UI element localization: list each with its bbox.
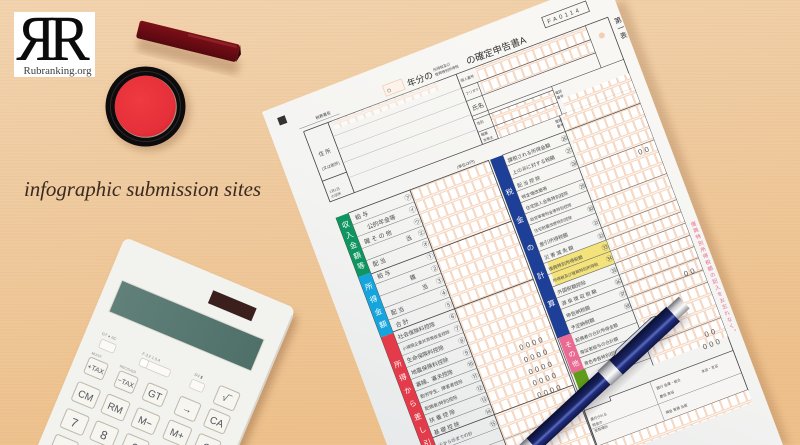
circled row numbers: ⑦ xyxy=(453,324,462,334)
form header: 所得税及び xyxy=(432,61,451,72)
right column panel: tax calculation: その他 xyxy=(563,340,581,371)
circled row numbers: ㉙ xyxy=(578,182,587,192)
taxpayer details: 氏名 xyxy=(471,101,485,113)
circled row numbers: ⑪ xyxy=(471,372,480,382)
circled row numbers: ㊱ xyxy=(614,278,623,287)
calculation row labels: 差引所得税額 xyxy=(538,231,569,249)
circled row numbers: ㉖ xyxy=(560,134,569,144)
income row labels: 雑 xyxy=(409,273,417,282)
form header: 年分の xyxy=(405,69,435,89)
bank refund panel xyxy=(577,337,753,445)
taxpayer details: 性別 xyxy=(476,119,485,126)
calculation row labels: 災 害 減 免 額 xyxy=(543,244,574,262)
bank refund panel: 還付される xyxy=(589,411,608,422)
address box xyxy=(304,17,748,445)
sheet number: 第一表 xyxy=(613,15,629,41)
key labels xyxy=(52,339,235,445)
calculation row labels: 源 泉 徴 収 税 額 xyxy=(561,288,598,308)
calculation row labels xyxy=(507,141,631,367)
circled row numbers: ㉟ xyxy=(609,266,619,276)
switch labels: GT ● AC xyxy=(101,331,117,341)
income row labels: 寡婦、寡夫控除 xyxy=(415,368,454,389)
address labels: 1月1日 xyxy=(329,186,341,194)
address labels: (又は居所) xyxy=(321,159,341,171)
left column panel: income: (単位は円) xyxy=(456,157,476,170)
switches xyxy=(98,339,206,393)
income row labels: 合 計 xyxy=(394,317,410,329)
circled row numbers: ⑨ xyxy=(462,348,471,358)
strip: deductions xyxy=(381,333,460,445)
taxpayer details xyxy=(456,17,644,171)
income row labels: 当 xyxy=(405,234,413,243)
form header: の確定申告書A xyxy=(464,34,528,67)
upper navy barrel xyxy=(608,307,680,376)
calculation row labels: 配偶者の合計所得金額 xyxy=(574,321,619,344)
income row labels: 勤労学生、障害者控除 xyxy=(419,378,464,400)
calculation row labels: 住宅借入金等特別控除 xyxy=(525,189,570,212)
preprinted zeros, right column: 00 xyxy=(703,326,719,339)
circled row numbers: ㋒ xyxy=(413,217,422,227)
preprinted zeros, right column xyxy=(629,144,725,352)
income row labels xyxy=(352,197,488,445)
script title: infographic submission sites xyxy=(24,177,261,201)
calculation row labels: 住宅耐震改修特別控除 xyxy=(533,214,573,234)
form header xyxy=(295,33,528,131)
right column panel: tax calculation xyxy=(484,87,730,398)
logo: Rubranking.org: R xyxy=(49,3,90,74)
pen clip xyxy=(612,315,657,357)
highlighted yellow rows xyxy=(547,240,615,286)
circled row numbers: ㉚ xyxy=(586,205,596,214)
bank refund panel: 銀行 金庫・組合 xyxy=(656,377,682,391)
calculation row labels: 復興特別所得税額 xyxy=(548,253,584,273)
key labels: M+ xyxy=(168,427,185,443)
circled row numbers: ⑥ xyxy=(448,312,458,322)
income row labels: 給 与 xyxy=(354,209,369,222)
income row labels: 地震保険料控除 xyxy=(410,355,450,377)
red stamp stick xyxy=(133,20,244,75)
display xyxy=(109,280,264,371)
preprinted zeros, left column: 0000 xyxy=(523,346,551,364)
tax return form xyxy=(277,0,766,445)
calculation row labels: 上の㉖に対する税額 xyxy=(511,154,556,176)
calculation row labels: 専従者給与の合計額 xyxy=(579,335,620,356)
taxpayer details: 個人番号 xyxy=(460,73,475,83)
switch labels: F 3 2 1 0 A xyxy=(142,351,162,363)
strip: other xyxy=(559,334,584,374)
circled row numbers xyxy=(560,134,632,312)
circled row numbers: ④ xyxy=(439,289,449,299)
left column panel: income: 収入金額等 xyxy=(340,219,368,274)
form header: ○ xyxy=(385,85,393,95)
calculation row labels: 予定納税額 xyxy=(570,317,596,332)
circled row numbers: ㉜ xyxy=(596,232,606,242)
key labels: RM xyxy=(106,401,124,417)
taxpayer details: 000 xyxy=(618,112,632,122)
registration mark xyxy=(277,115,287,126)
bank refund panel: 本店・支店 xyxy=(701,363,719,374)
pen tip chrome xyxy=(667,297,690,319)
strip: income subtotal xyxy=(358,273,393,338)
circled row numbers: ㋔ xyxy=(421,240,430,250)
logo: Rubranking.org: Rubranking.org xyxy=(24,66,92,77)
form code box xyxy=(542,1,590,28)
income row labels: 雑 そ の 他 xyxy=(363,228,393,246)
key labels: +TAX xyxy=(86,363,105,377)
circled row numbers: ③ xyxy=(435,276,444,286)
income row labels: 配 当 xyxy=(390,305,405,317)
taxpayer details: 世帯主 xyxy=(482,134,494,143)
left column panel: income xyxy=(333,153,603,445)
calculation row labels: 政党等寄附金等特別控除 xyxy=(529,201,572,222)
calculation row labels: 青色申告特別控除額 xyxy=(583,346,624,367)
income row labels: 社会保険料控除 xyxy=(397,320,437,341)
circled row numbers: ㉞ xyxy=(605,254,614,264)
taxpayer details: 番号 xyxy=(556,93,565,100)
calculator xyxy=(2,237,302,445)
chrome ring xyxy=(598,360,623,385)
key labels: M− xyxy=(136,415,154,430)
strip: tax calculation xyxy=(490,155,570,338)
red ink pad xyxy=(106,66,190,151)
paper shadow xyxy=(270,0,790,445)
calculation row labels: 外国税額控除 xyxy=(556,279,587,296)
paper sheet xyxy=(262,0,783,445)
key labels: GT xyxy=(146,388,163,403)
ballpoint pen xyxy=(509,294,694,445)
taxpayer details: 整理 xyxy=(554,117,563,124)
strip: extension xyxy=(573,369,592,392)
switch labels xyxy=(90,330,204,399)
left column panel: income: 所得金額 xyxy=(362,280,391,335)
calculation row labels: 特定増改築等 xyxy=(521,185,549,201)
circled row numbers: ㉝ xyxy=(601,243,610,253)
taxpayer details: フリガナ xyxy=(465,86,480,96)
preprinted zeros, left column: 0000 xyxy=(527,359,556,376)
circled row numbers: ㊳ xyxy=(623,302,632,312)
switch labels: 5/4 ▮ xyxy=(194,372,204,380)
switch labels: MU/ST xyxy=(91,351,103,359)
lower navy barrel xyxy=(526,372,610,445)
income row labels: 配 当 xyxy=(371,256,387,268)
preprinted zeros, right column: 000 xyxy=(701,336,724,352)
right column panel: tax calculation: 税金の計算 xyxy=(503,185,565,329)
preprinted zeros, left column xyxy=(518,334,564,400)
circled row numbers: ① xyxy=(426,252,435,262)
income row labels: 扶 養 控 除 xyxy=(428,407,457,425)
circled row numbers: ⑧ xyxy=(457,336,467,346)
taxpayer details: 職業 xyxy=(480,130,489,137)
form header: 税務署長 xyxy=(314,109,331,120)
bank refund panel: 受取場所 xyxy=(594,423,609,433)
income row labels: 公的年金等 xyxy=(366,213,397,231)
address labels: 住 所 xyxy=(317,146,332,159)
circled row numbers: ② xyxy=(430,264,440,274)
circled row numbers: ⑬ xyxy=(479,395,489,405)
income row labels: 配偶者(特別)控除 xyxy=(424,394,459,412)
pen lower chrome xyxy=(516,438,539,445)
circled row numbers: ⑫ xyxy=(475,384,485,394)
calculation row labels: 所得税及び復興特別所得税 xyxy=(552,261,599,283)
key labels: 7 xyxy=(69,415,80,431)
taxpayer details: 番号 xyxy=(556,122,565,129)
solar panel xyxy=(208,290,257,321)
key labels: 8 xyxy=(98,427,110,443)
address labels xyxy=(314,145,351,199)
circled row numbers: ㉘ xyxy=(569,160,579,170)
key labels: CM xyxy=(76,388,95,405)
circled row numbers: ㉛ xyxy=(591,219,601,228)
income row labels: 生命保険料控除 xyxy=(405,343,445,365)
circled row numbers: ㋓ xyxy=(417,229,426,239)
logo: Rubranking.org: R xyxy=(16,4,55,75)
circled row numbers: ⑮ xyxy=(489,420,498,430)
preprinted zeros, right column: 00 xyxy=(637,144,653,157)
form header: 復興特別所得税 xyxy=(434,63,460,77)
key labels: → xyxy=(180,403,194,417)
income row labels: 給 与 xyxy=(376,268,392,281)
income row labels: 当 xyxy=(421,282,429,292)
calculation row labels: 配 当 控 除 xyxy=(516,175,541,190)
key labels: √‾ xyxy=(220,391,233,406)
circled row numbers: ⑭ xyxy=(484,407,493,417)
strip: income amount xyxy=(336,213,370,277)
income row labels: 小規模企業共済等掛金控除 xyxy=(401,328,452,353)
income row labels: 基 礎 控 除 xyxy=(433,420,461,437)
bank refund panel: 農協 漁協 xyxy=(659,389,675,399)
form code box: FA0114 xyxy=(547,7,582,25)
circled row numbers: ㋐ xyxy=(403,193,413,203)
circled row numbers xyxy=(403,193,498,430)
bank refund panel: 預金 普通 当座 xyxy=(665,402,688,415)
logo: Rubranking.org xyxy=(14,3,95,77)
preprinted zeros, left column: 0000 xyxy=(518,334,546,352)
circled row numbers: ⑩ xyxy=(466,360,475,370)
calculation row labels: 申告納税額 xyxy=(565,304,591,320)
circled row numbers: ㉗ xyxy=(564,146,574,156)
key labels: −TAX xyxy=(116,377,135,390)
circled row numbers: ㊲ xyxy=(618,290,628,300)
bank refund panel: 税金の xyxy=(592,419,604,428)
margin reminder in pink: 復興特別所得税額の記入をお忘れなく。 xyxy=(688,219,738,337)
calculation row labels: 課税される所得金額 xyxy=(507,142,551,164)
circled row numbers: ⑤ xyxy=(444,301,453,311)
circled row numbers: ㋑ xyxy=(408,205,417,215)
keys xyxy=(49,334,241,445)
preprinted zeros, left column: 0000 xyxy=(536,382,564,400)
taxpayer details: 電話 xyxy=(554,88,563,95)
preprinted zeros, right column: 00 xyxy=(683,265,698,279)
address labels: の住所 xyxy=(330,190,342,199)
switch labels: RECOVER xyxy=(119,364,137,375)
preprinted zeros, left column: 0000 xyxy=(531,370,560,388)
key labels: CA xyxy=(208,415,225,431)
